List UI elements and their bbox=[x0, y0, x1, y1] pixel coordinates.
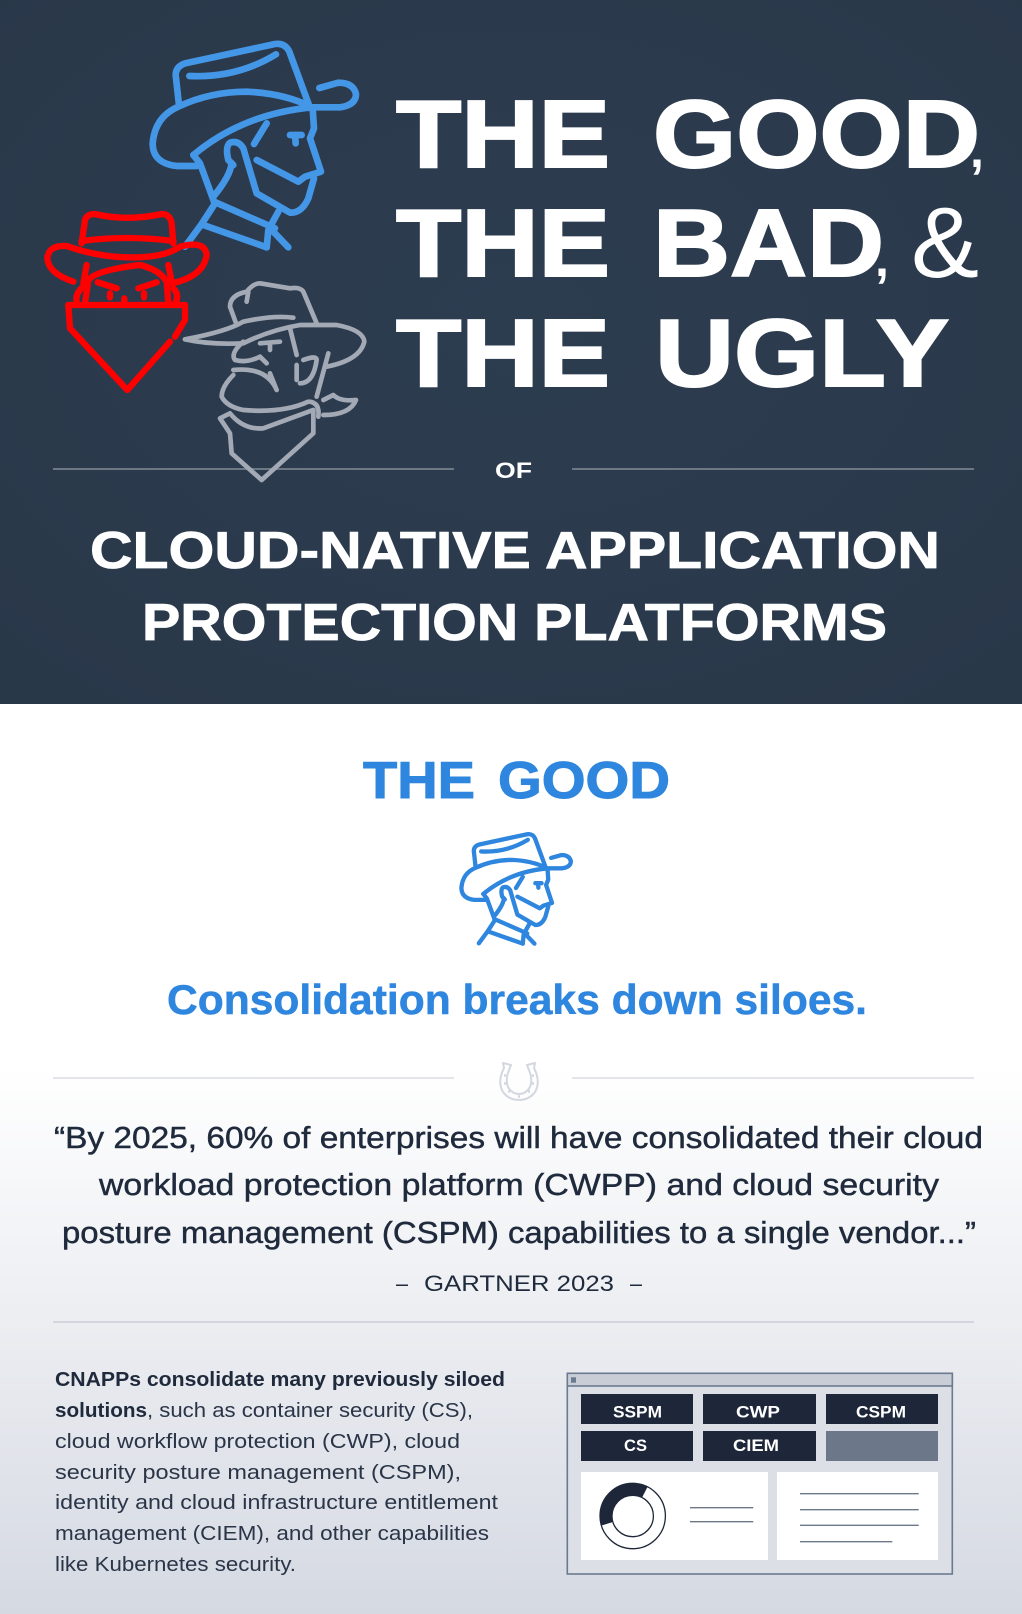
module tile: SSPM bbox=[581, 1394, 693, 1424]
module tile: CWP bbox=[703, 1394, 816, 1424]
module tile: SSPM: SSPM bbox=[613, 1402, 662, 1422]
divider lines around horseshoe bbox=[53, 1077, 974, 1079]
quote attribution: GARTNER 2023 bbox=[424, 1271, 614, 1296]
text block: CNAPPs description: cloud workflow protection (CWP), cloud bbox=[55, 1430, 460, 1453]
title: BAD bbox=[653, 190, 884, 297]
panel: good section background bbox=[0, 704, 1022, 1614]
title: GOOD bbox=[653, 81, 980, 188]
module tile: CIEM: CIEM bbox=[733, 1436, 779, 1455]
quote: posture management (CSPM) capabilities to a single vendor...” bbox=[62, 1215, 976, 1250]
illustration: platform window bbox=[567, 1373, 952, 1574]
text block: CNAPPs description: management (CIEM), and other capabilities bbox=[55, 1522, 489, 1545]
heading: the good: GOOD bbox=[498, 752, 670, 810]
module tile: empty bbox=[826, 1431, 938, 1461]
title: & bbox=[911, 187, 979, 299]
subheading: Consolidation breaks down siloes. bbox=[167, 976, 867, 1023]
window button bbox=[571, 1377, 576, 1383]
title: UGLY bbox=[655, 300, 949, 407]
module tile: CS bbox=[581, 1431, 693, 1461]
quote attribution: – bbox=[630, 1271, 643, 1296]
subtitle: PROTECTION PLATFORMS bbox=[142, 594, 887, 652]
title bbox=[396, 81, 984, 407]
module tile: CIEM bbox=[703, 1431, 816, 1461]
text block: CNAPPs description: identity and cloud infrastructure entitlement bbox=[55, 1491, 498, 1514]
text block: CNAPPs description: security posture management (CSPM), bbox=[55, 1461, 461, 1484]
divider lines around OF bbox=[53, 468, 974, 470]
module tile: CS: CS bbox=[624, 1436, 647, 1455]
title: THE bbox=[396, 81, 610, 188]
subtitle: CLOUD-NATIVE APPLICATION bbox=[90, 522, 940, 580]
title: THE bbox=[396, 300, 610, 407]
panel: header background bbox=[0, 0, 1022, 704]
module tile: CWP: CWP bbox=[736, 1402, 780, 1422]
icon: red bad bandit bbox=[47, 214, 207, 390]
window title bar bbox=[567, 1373, 952, 1386]
text block: CNAPPs description: solutions bbox=[55, 1399, 147, 1422]
heading: the good: THE bbox=[363, 752, 475, 810]
subtitle bbox=[90, 522, 940, 652]
text block: CNAPPs description bbox=[55, 1368, 505, 1576]
module tile: CSPM bbox=[826, 1394, 938, 1424]
quote attribution bbox=[396, 1271, 643, 1296]
text block: CNAPPs description: , such as container security (CS), bbox=[147, 1399, 473, 1422]
quote: “By 2025, 60% of enterprises will have consolidated their cloud bbox=[54, 1120, 983, 1155]
quote bbox=[54, 1120, 983, 1250]
card: donut chart bbox=[581, 1472, 768, 1560]
divider bbox=[53, 1321, 974, 1323]
heading: the good bbox=[363, 752, 670, 810]
card: text lines bbox=[777, 1472, 938, 1560]
icon: blue good cowboy bbox=[153, 44, 356, 247]
title: , bbox=[875, 231, 889, 287]
module tile: CSPM: CSPM bbox=[856, 1402, 906, 1422]
icon: horseshoe bbox=[500, 1063, 538, 1100]
label: OF: OF bbox=[495, 458, 532, 483]
quote attribution: – bbox=[396, 1271, 409, 1296]
text block: CNAPPs description: like Kubernetes security. bbox=[55, 1553, 296, 1576]
icon: small blue cowboy bbox=[461, 834, 571, 944]
title: , bbox=[970, 122, 984, 178]
text block: CNAPPs description: CNAPPs consolidate many previously siloed bbox=[55, 1368, 505, 1391]
quote: workload protection platform (CWPP) and cloud security bbox=[98, 1167, 940, 1202]
title: THE bbox=[396, 190, 610, 297]
icon: gray ugly cowboy bbox=[185, 283, 364, 480]
